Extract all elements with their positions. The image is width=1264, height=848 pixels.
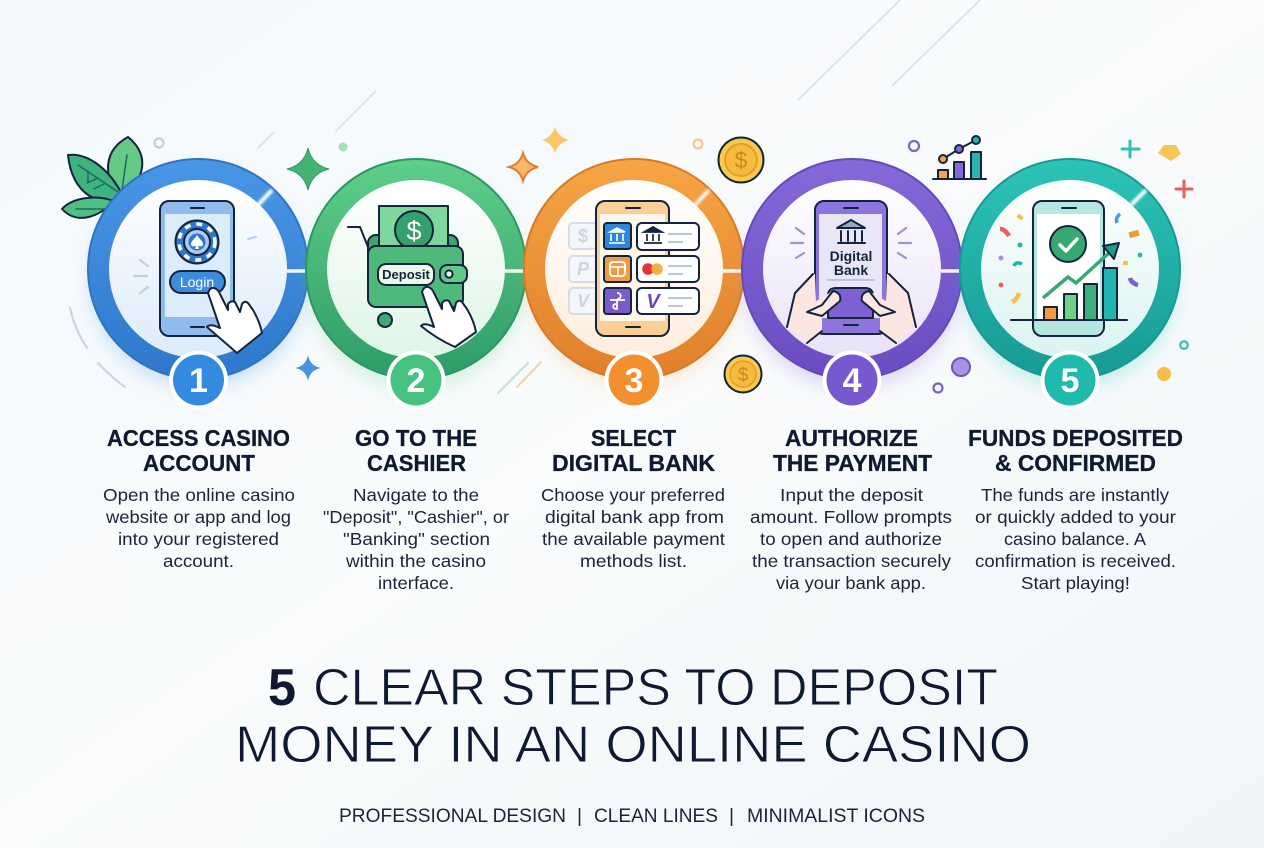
icon: gold coin top [718, 138, 764, 182]
icon: phone showing digital bank: Digital [830, 248, 872, 264]
panel: step 5 [960, 159, 1180, 388]
heading: step 2 [355, 425, 477, 476]
text: step 5 description: Start playing! [1021, 573, 1130, 593]
text: step 2 description: "Banking" section [343, 529, 490, 549]
icon: gold coin bottom [724, 356, 762, 392]
icon: faded payment options [569, 223, 597, 314]
text: step 5 description: or quickly added to your [975, 507, 1176, 527]
footer tagline [339, 805, 925, 827]
text: step 5 description: casino balance. A [1004, 529, 1146, 549]
footer tagline: | [577, 805, 582, 827]
badge 3 [604, 350, 664, 410]
panel: step 2 [306, 159, 545, 388]
heading: step 4: THE PAYMENT [773, 450, 933, 476]
text: step 1 description: website or app and log [105, 507, 291, 527]
panel: step 3 [524, 159, 763, 388]
badge 2 [386, 350, 446, 410]
text: step 5 description: The funds are instantly [981, 485, 1169, 505]
badge 4: 4 [843, 362, 862, 400]
text: step 4 description: via your bank app. [776, 573, 926, 593]
text: step 4 description: amount. Follow prompts [750, 507, 952, 527]
step number badges [169, 350, 1100, 410]
panel: step 1 [88, 159, 327, 388]
text: step 3 description: Choose your preferred [541, 485, 725, 505]
text: step 2 description: Navigate to the [353, 485, 479, 505]
title: MONEY IN AN ONLINE CASINO [235, 716, 1031, 774]
icon: phone with casino chip and login button: Login [180, 274, 214, 290]
icon: phone showing digital bank [787, 201, 916, 343]
heading: step 3 [552, 425, 715, 476]
heading: step 4 [773, 425, 933, 476]
title: 5 [268, 659, 296, 717]
footer tagline: CLEAN LINES [594, 805, 718, 827]
text: step 2 description: within the casino [345, 551, 486, 571]
text: step 4 description: the transaction securely [752, 551, 951, 571]
footer tagline: MINIMALIST ICONS [747, 805, 925, 827]
icon: gold coin bottom: $ [738, 365, 749, 386]
text: step 5 description: confirmation is received. [975, 551, 1176, 571]
heading: step 5: FUNDS DEPOSITED [968, 425, 1183, 451]
decoration: small dots and sparkles [70, 127, 1192, 393]
icon: phone with bank list: V [646, 291, 661, 313]
text: step 4 description: to open and authorize [760, 529, 942, 549]
icon: pointing hand [421, 287, 476, 347]
heading: step 1: ACCESS CASINO [107, 425, 290, 451]
text: step 2 description: interface. [378, 573, 454, 593]
icon: faded payment options: V [577, 291, 591, 311]
text: step 4 description [750, 485, 952, 593]
badge 1: 1 [189, 362, 208, 400]
icon: hands holding phone [787, 274, 916, 343]
icon: confetti [998, 214, 1142, 302]
badge 3: 3 [625, 362, 643, 400]
footer tagline: PROFESSIONAL DESIGN [339, 805, 566, 827]
badge 2: 2 [407, 362, 425, 400]
heading: step 3: SELECT [591, 425, 677, 451]
text: step 1 description: Open the online casino [103, 485, 295, 505]
heading: step 1: ACCOUNT [143, 450, 256, 476]
badge 5 [1040, 350, 1100, 410]
decoration: leaves [62, 137, 142, 218]
badge 5: 5 [1061, 362, 1079, 400]
text: step 3 description: digital bank app from [545, 507, 724, 527]
text: step 1 description: into your registered [118, 529, 279, 549]
icon: faded payment options: $ [578, 226, 588, 246]
text: step 4 description: Input the deposit [780, 485, 923, 505]
title [235, 659, 1031, 774]
heading: step 2: GO TO THE [355, 425, 477, 451]
title: CLEAR STEPS TO DEPOSIT [313, 659, 998, 717]
panel: step 4 [742, 159, 981, 388]
icon: phone showing digital bank: Bank [834, 262, 868, 278]
icon: faded payment options: P [577, 259, 590, 279]
heading: step 3: DIGITAL BANK [552, 450, 715, 476]
heading: step 5 [968, 425, 1183, 476]
badge 4 [822, 350, 882, 410]
icon: mini bar chart [933, 136, 986, 179]
icon: phone with bank list [596, 201, 699, 336]
badge 1 [169, 350, 228, 410]
footer tagline: | [729, 805, 734, 827]
icon: phone with check and growth chart [1011, 201, 1127, 336]
text: step 5 description [975, 485, 1176, 593]
icon: gold coin top: $ [735, 147, 748, 173]
heading: step 5: & CONFIRMED [995, 450, 1156, 476]
heading: step 2: CASHIER [367, 450, 466, 476]
icon: wallet with banknote in cart [348, 206, 476, 347]
text: step 1 description [103, 485, 295, 571]
icon: pointing hand [207, 288, 262, 353]
text: step 3 description [541, 485, 725, 571]
heading: step 1 [107, 425, 290, 476]
text: step 2 description: "Deposit", "Cashier", or [323, 507, 509, 527]
icon: wallet with banknote in cart: $ [406, 216, 422, 246]
icon: wallet with banknote in cart: Deposit [382, 267, 431, 282]
heading: step 4: AUTHORIZE [785, 425, 918, 451]
text: step 2 description [323, 485, 509, 593]
text: step 3 description: methods list. [580, 551, 687, 571]
text: step 3 description: the available payment [542, 529, 725, 549]
icon: phone with casino chip and login button [134, 201, 262, 353]
text: step 1 description: account. [163, 551, 234, 571]
